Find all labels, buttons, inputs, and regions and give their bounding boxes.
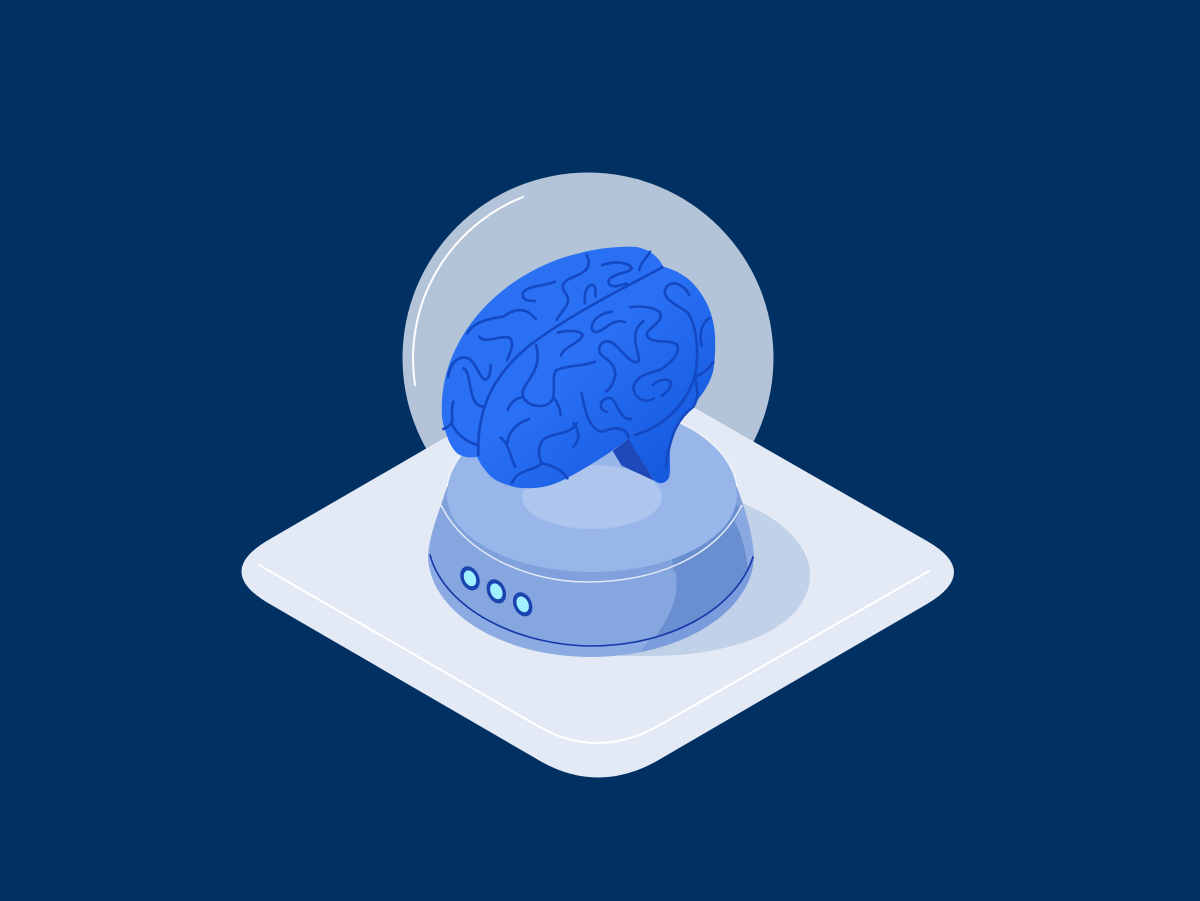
navy ring [430, 555, 753, 646]
glass dome [402, 172, 774, 544]
brain stem wedge [613, 438, 654, 481]
pedestal shadow [620, 503, 810, 656]
side reflection strip [736, 525, 748, 568]
rim band [441, 487, 742, 582]
rim band shade [672, 503, 741, 572]
bottom lip [428, 487, 754, 657]
brain silhouette [442, 247, 715, 488]
white ring [441, 505, 742, 582]
illustration: brain on pedestal [242, 172, 954, 778]
indicator lights [456, 563, 536, 620]
top disc [447, 405, 737, 572]
pedestal [428, 405, 760, 660]
shaded side [656, 520, 748, 636]
brain [442, 247, 715, 488]
brain folds [443, 252, 713, 483]
top disc centre [522, 465, 662, 529]
disc halo [447, 405, 737, 495]
pedestal body [430, 487, 753, 646]
platform [241, 362, 954, 778]
platform edge highlight [259, 565, 929, 743]
dome highlight [413, 197, 523, 385]
shaded lip [640, 555, 754, 652]
